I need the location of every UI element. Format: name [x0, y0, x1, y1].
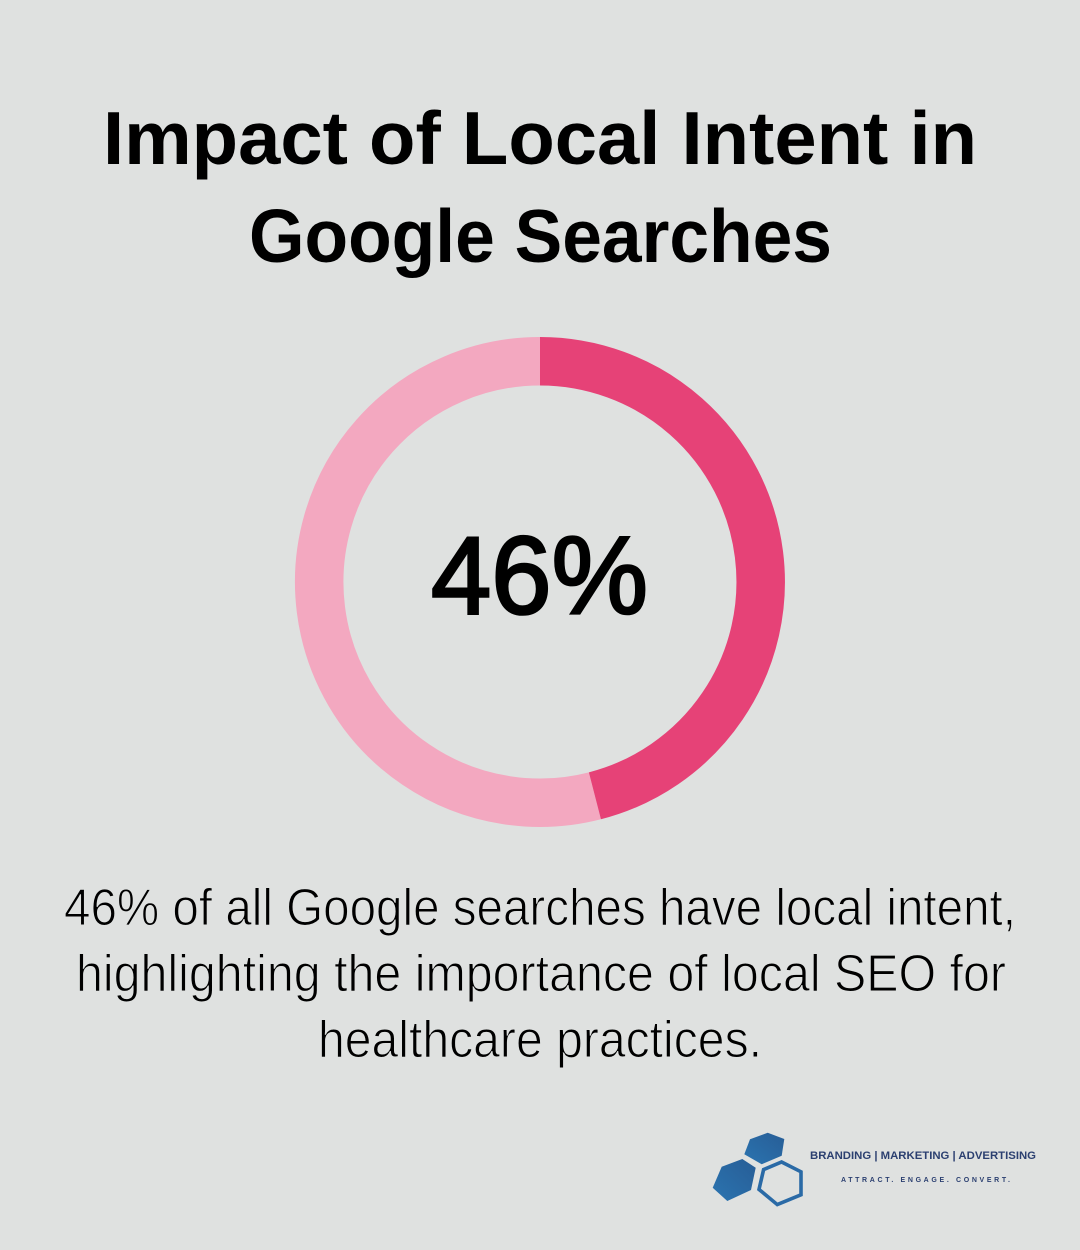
description text: highlighting the importance of local SEO for: [76, 944, 1006, 1002]
donut chart: 46%: [319, 361, 761, 803]
title: Impact of Local Intent in: [103, 96, 977, 180]
title: Google Searches: [249, 194, 832, 278]
logo slogan: ATTRACT. ENGAGE. CONVERT.: [841, 1177, 1010, 1184]
center value: 46%: [431, 514, 648, 638]
highlighted 46% arc: [540, 361, 761, 796]
description text: 46% of all Google searches have local intent,: [64, 878, 1016, 936]
description text: healthcare practices.: [318, 1010, 762, 1068]
logo tagline: BRANDING | MARKETING | ADVERTISING: [810, 1150, 1036, 1162]
remaining 54% ring: [319, 361, 595, 803]
icon: hexagons: [713, 1133, 801, 1205]
title: [103, 96, 977, 278]
description text: [64, 878, 1016, 1068]
logo: [713, 1133, 1036, 1205]
